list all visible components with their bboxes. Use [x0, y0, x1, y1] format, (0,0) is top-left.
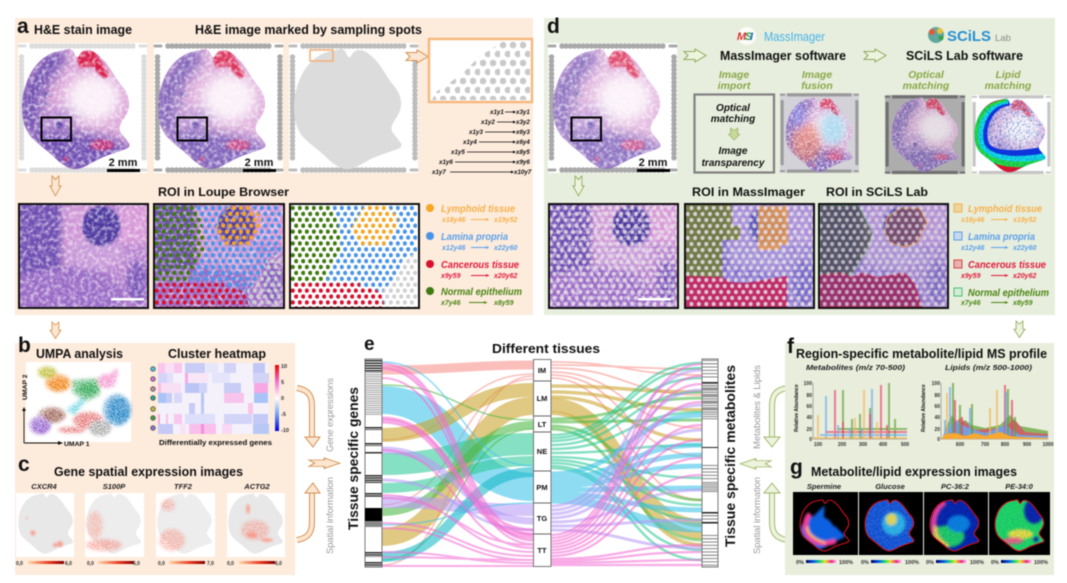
chart: lipids: 60: [934, 404, 940, 410]
arrow to MassImager: [684, 49, 706, 62]
chart: metabolites: 200: [838, 442, 846, 448]
column: tissues: LM: [537, 394, 547, 403]
image: H&E marked by spots: 2 mm: [245, 157, 274, 169]
chart: UMAP scatter: [26, 362, 131, 442]
step labels: Image: [802, 69, 832, 81]
coordinate transform list: x1y3: [468, 129, 483, 136]
image: sampling spots map: [289, 43, 418, 173]
heading: ROI in SCiLS Lab: ROI in SCiLS Lab: [826, 185, 928, 199]
coordinate transform list: x3y1: [515, 109, 530, 116]
step labels: Optical: [908, 69, 945, 81]
image: lipid matching: [970, 95, 1051, 176]
label: Metabolites & Lipids: Metabolites & Lipids: [752, 365, 763, 449]
box: optical matching to transparency: matching: [711, 114, 755, 125]
panel letter b: b: [18, 334, 31, 357]
legend: regions: x20y62: [493, 273, 517, 280]
step labels: Lipid: [995, 69, 1021, 81]
colour scales: 7,0: [207, 561, 214, 567]
image names: Spermine: [807, 482, 841, 491]
legend: regions: x19y52: [1012, 217, 1036, 224]
map: CXCR4: [16, 493, 74, 557]
chart: lipids: 900: [1023, 442, 1031, 448]
panel e: sankey diagram: [346, 334, 738, 567]
column: tissues: TG: [537, 514, 547, 523]
image: image fusion: [780, 93, 859, 176]
box: optical matching to transparency: [694, 94, 774, 172]
colour scales: 100%: [905, 560, 919, 566]
ROI in MassImager with overlay: [683, 202, 816, 310]
image: H&E stain: 2 mm: [109, 157, 138, 169]
legend: regions: x7y46: [440, 300, 461, 307]
colour scales: [796, 560, 1048, 566]
panel f and g: metabolite data: [785, 335, 1054, 575]
legend: regions: x19y52: [493, 217, 517, 224]
colour scales: 100%: [1034, 560, 1048, 566]
chart: lipids: 1000: [1042, 442, 1054, 448]
heading: H&E stain image: H&E stain image: [34, 23, 132, 37]
legend: regions: Cancerous tissue: [441, 260, 519, 271]
column: tissues: LT: [538, 420, 547, 429]
curved arrow: spatial information: [297, 483, 320, 540]
colour scales: 6,0: [275, 561, 282, 567]
coordinate transform list: x8y5: [515, 149, 530, 156]
inset: enlarged spots: [429, 39, 532, 102]
column: tissues: IM: [538, 366, 546, 375]
legend: regions: x12y46: [960, 245, 984, 252]
chart: lipids: 700: [981, 442, 989, 448]
chart: lipids: 600: [956, 442, 964, 448]
arrow into sankey, right: [740, 459, 771, 469]
chart: metabolites: 100: [814, 442, 822, 448]
colour bar: [275, 364, 289, 434]
legend: regions: [954, 204, 1049, 307]
chart: metabolites: 400: [879, 442, 887, 448]
gene names: ACTG2: [243, 482, 271, 491]
coordinate transform list: x1y1: [489, 109, 504, 116]
map: ACTG2: [227, 493, 285, 557]
colour scales: 6,0: [65, 561, 72, 567]
heading: Cluster heatmap: Cluster heatmap: [168, 347, 266, 361]
image: Spermine: [793, 492, 858, 555]
panel a: H&E and Loupe Browser: [15, 15, 533, 315]
legend: regions: Normal epithelium: [968, 288, 1049, 299]
step labels: Image: [719, 69, 749, 81]
gene names: [31, 482, 271, 491]
coordinate transform list: x1y6: [438, 159, 453, 166]
flows: genes to tissues: [382, 362, 533, 566]
colour scales: 0,0: [227, 561, 234, 567]
panel letter d: d: [547, 15, 560, 38]
right label: Tissue specific metabolites: [723, 365, 738, 547]
legend: regions: x9y59: [440, 273, 461, 280]
image names: PE-34:0: [1005, 482, 1034, 491]
panel letter a: a: [17, 15, 29, 38]
panel letter f: f: [787, 335, 795, 358]
legend: regions: Cancerous tissue: [968, 260, 1046, 271]
legend: regions: Lamina propria: [441, 232, 508, 243]
colour scales: 100%: [970, 560, 984, 566]
chart: lipids: [921, 381, 1054, 448]
UMAP axes: [22, 374, 90, 448]
colour scales: 100%: [839, 560, 853, 566]
heading: Metabolite/lipid expression images: Metabolite/lipid expression images: [811, 465, 1017, 479]
chart: metabolites: 300: [859, 442, 867, 448]
coordinate transform list: x1y4: [462, 139, 477, 146]
chart: metabolites: 40: [806, 415, 812, 421]
coordinate transform list: x1y7: [431, 169, 446, 176]
ROI H&E image: [17, 202, 150, 310]
legend: regions: Lymphoid tissue: [968, 204, 1042, 215]
logo: MassImager: M: [737, 31, 747, 43]
colour bar: 0: [281, 396, 284, 402]
image: optical matching: [885, 94, 965, 176]
coordinate transform list: x1y5: [450, 149, 465, 156]
chart titles: Metabolites (m/z 70-500): [806, 363, 906, 372]
column: tissues: PM: [536, 483, 548, 492]
colour bar: -10: [281, 428, 289, 434]
image names: [807, 482, 1034, 491]
box: optical matching to transparency: Optical: [716, 103, 750, 114]
box: optical matching to transparency: Image: [719, 146, 748, 157]
arrow down to ROI: [50, 176, 61, 196]
image: H&E on d: 2 mm: [639, 157, 668, 169]
heading: ROI in MassImager: ROI in MassImager: [692, 185, 805, 199]
panel letter e: e: [364, 334, 375, 355]
column: genes: [365, 359, 382, 567]
heading: Gene spatial expression images: Gene spatial expression images: [54, 465, 243, 479]
column: tissues: NE: [537, 447, 547, 456]
image: PE-34:0: [989, 492, 1050, 556]
chart titles: Lipids (m/z 500-1000): [945, 363, 1033, 372]
legend: regions: x22y60: [1012, 245, 1036, 252]
legend: regions: x8y59: [1012, 300, 1033, 307]
column: metabolites: [702, 359, 718, 567]
curved arrow: gene expressions: [297, 388, 320, 447]
colour scales: 0,0: [16, 561, 23, 567]
step labels: fusion: [801, 80, 833, 92]
column: tissues: TT: [537, 546, 547, 555]
gene names: S100P: [103, 482, 126, 491]
gene names: TFF2: [174, 482, 193, 491]
arrow down to ROI: [573, 176, 584, 196]
chart: metabolites: 0: [809, 437, 812, 443]
logo: MassImager: MassImager: [764, 30, 825, 44]
ROI with coloured spots: [152, 202, 285, 310]
chart: lipids: 20: [934, 427, 940, 433]
arrow to SCiLS: [864, 49, 886, 62]
image: Glucose: [859, 492, 923, 556]
legend: regions: x18y46: [441, 217, 465, 224]
image: H&E stain: [15, 43, 147, 176]
heading: MassImager software: MassImager software: [720, 49, 846, 63]
step labels: matching: [903, 80, 950, 92]
chart: metabolites: 80: [806, 393, 812, 399]
ROI spots only: [290, 204, 419, 308]
caption: Differentially expressed genes: Differentially expressed genes: [159, 440, 272, 447]
coordinate transform list: x6y4: [515, 139, 530, 146]
legend: regions: x12y46: [441, 245, 465, 252]
logo: SCiLS Lab: Lab: [995, 33, 1011, 44]
ROI with holes: [547, 202, 680, 310]
legend: regions: [426, 204, 522, 307]
panel d: mass spectrometry software: [544, 15, 1055, 315]
arrow to inset: [406, 50, 428, 63]
map: TFF2: [156, 493, 215, 557]
arrow down from panel a: [50, 322, 61, 338]
coordinate transform list: x10y7: [513, 169, 532, 176]
legend: regions: Lamina propria: [968, 232, 1035, 243]
curved arrow: spatial: [764, 483, 787, 540]
colour scales: 0%: [991, 560, 999, 566]
image: PC-36:2: [924, 492, 988, 556]
logo: SCiLS Lab: [928, 27, 1011, 45]
legend: regions: x7y46: [960, 300, 981, 307]
chart: lipids: 40: [934, 415, 940, 421]
chart: cluster heatmap: [158, 363, 269, 434]
chart: metabolites: 20: [806, 427, 812, 433]
legend: regions: x18y46: [960, 217, 984, 224]
box: optical matching to transparency: transparency: [702, 158, 765, 169]
chart: metabolites: 60: [806, 404, 812, 410]
colour scales: 0%: [861, 560, 869, 566]
cluster markers: [151, 367, 155, 430]
legend: regions: x20y62: [1012, 273, 1036, 280]
arrow into sankey, left: [309, 458, 340, 468]
colour bar: 10: [281, 364, 287, 370]
colour scales: 0%: [796, 560, 804, 566]
colour scales: 0%: [926, 560, 934, 566]
label: Spatial information left: Spatial information: [325, 477, 336, 554]
label: Gene expressions: Gene expressions: [325, 378, 336, 452]
logo: MassImager: [737, 27, 825, 45]
image names: PC-36:2: [941, 482, 970, 491]
heading: UMPA analysis: UMPA analysis: [36, 347, 123, 361]
coordinate transform list: x3y2: [515, 119, 530, 126]
legend: regions: x9y59: [960, 273, 981, 280]
heading: SCiLS Lab software: SCiLS Lab software: [906, 49, 1023, 63]
panel b and c: gene data: [15, 334, 295, 575]
heading: Region-specific profile: Region-specific metabolite/lipid MS profile: [796, 347, 1047, 361]
step labels: [718, 69, 1032, 92]
logo: MassImager: S: [745, 31, 753, 43]
legend: regions: Normal epithelium: [441, 287, 522, 298]
coordinate transform list: x1y2: [480, 119, 495, 126]
chart: lipids: 800: [1001, 442, 1009, 448]
coordinate transform list: x9y6: [515, 159, 530, 166]
chart: lipids: 80: [934, 393, 940, 399]
legend: regions: x22y60: [493, 245, 517, 252]
chart: metabolites: 100: [804, 381, 812, 387]
step labels: import: [718, 80, 751, 92]
chart: metabolites: [794, 381, 909, 448]
colour scales: 0,0: [158, 561, 165, 567]
ROI in SCiLS with outlines: [817, 202, 950, 310]
chart: lipids: Relative Abundance: [921, 384, 927, 432]
step labels: matching: [985, 80, 1032, 92]
logo: SCiLS Lab: SCiLS: [947, 28, 991, 45]
chart: metabolites: Relative Abundance: [794, 384, 800, 432]
colour scales: 6,0: [133, 561, 140, 567]
logo: MassImager: I: [750, 31, 754, 43]
chart titles: [806, 363, 1033, 372]
left label: Tissue specific genes: [346, 387, 361, 530]
legend: regions: x8y59: [493, 300, 514, 307]
chart: lipids: 0: [937, 437, 940, 443]
image names: Glucose: [875, 482, 905, 491]
colour scales: 0,0: [87, 561, 94, 567]
image: H&E marked by spots: [151, 43, 283, 176]
legend: regions: Lymphoid tissue: [441, 204, 515, 215]
chart: lipids: 100: [932, 381, 940, 387]
colour bar: 5: [281, 380, 284, 386]
UMAP axes: UMAP 1: [64, 441, 90, 448]
image: H&E on d: [546, 43, 677, 176]
coordinate transform list: x6y3: [515, 129, 530, 136]
arrow down from panel d: [1014, 321, 1025, 338]
heading: Different tissues: Different tissues: [492, 341, 600, 356]
UMAP axes: UMAP 2: [22, 374, 29, 400]
chart: metabolites: 500: [901, 442, 909, 448]
panel letter c: c: [18, 453, 30, 476]
gene names: CXCR4: [31, 482, 58, 491]
curved arrow: metabolites: [764, 388, 787, 447]
column: tissues: [533, 360, 551, 566]
heading: H&E image marked by sampling spots: H&E image marked by sampling spots: [195, 23, 422, 37]
colour scales: [16, 561, 282, 567]
colour bar: -5: [281, 412, 286, 418]
heading: ROI in Loupe Browser: ROI in Loupe Browser: [158, 185, 289, 199]
coordinate transform list: [431, 109, 532, 176]
flows: tissues to metabolites: [551, 362, 702, 565]
map: S100P: [85, 493, 144, 557]
panel letter g: g: [790, 456, 803, 479]
label: Spatial information right: Spatial information: [752, 477, 763, 554]
